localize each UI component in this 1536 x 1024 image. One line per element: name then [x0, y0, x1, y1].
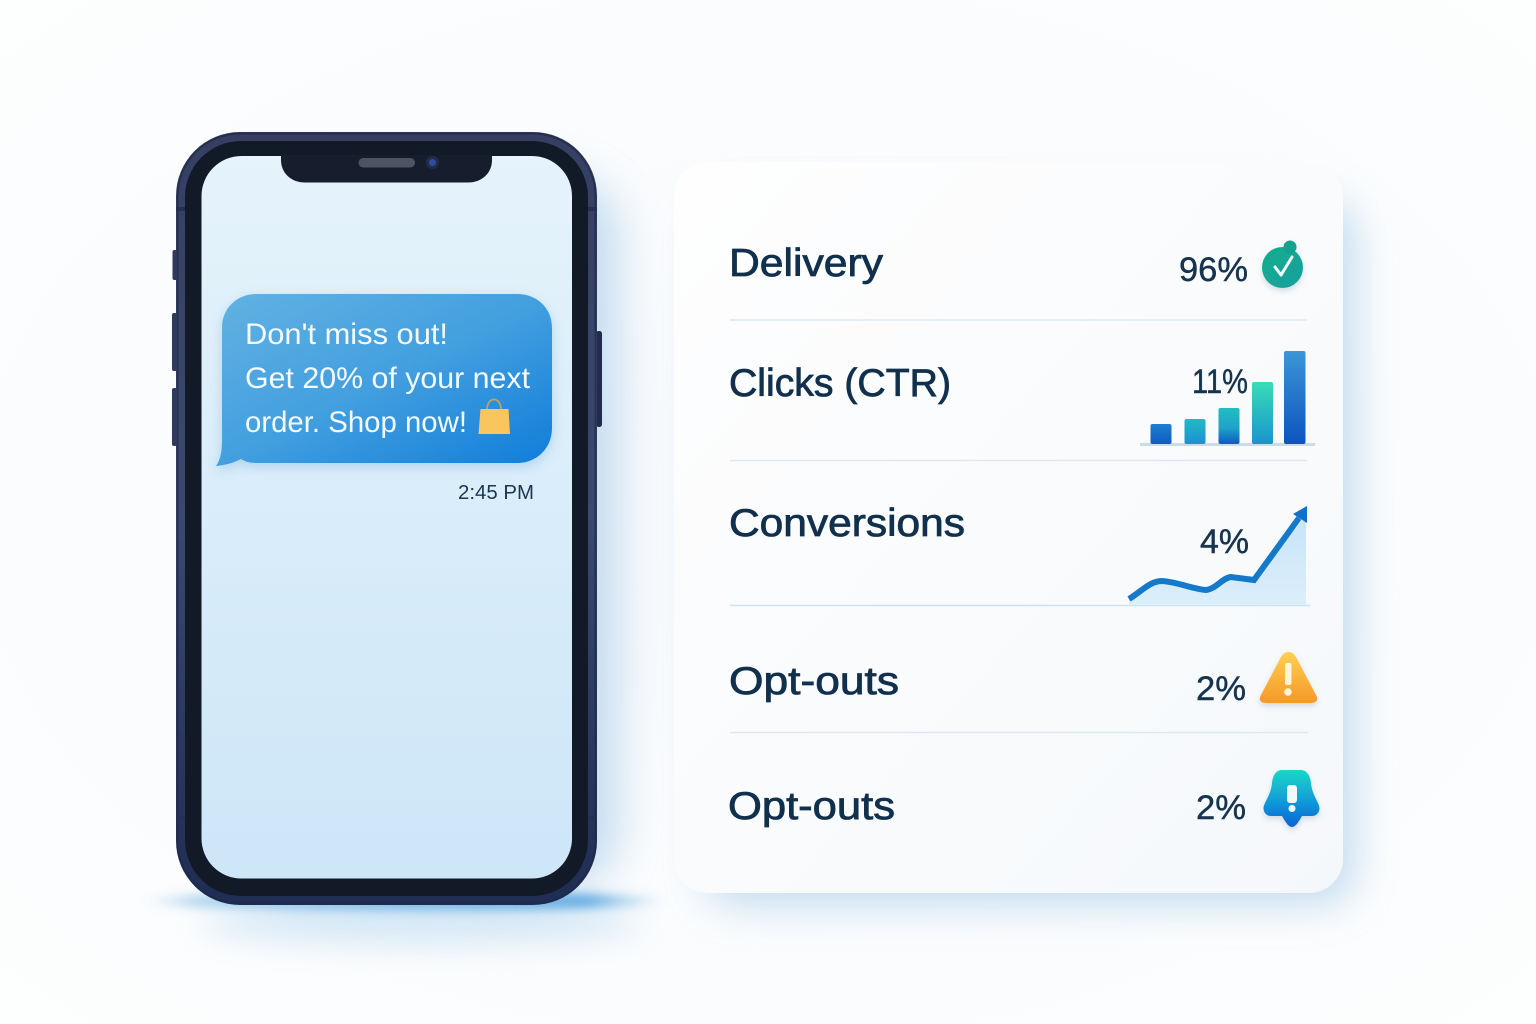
row: opt-outs bell	[728, 770, 1320, 828]
line chart	[1129, 506, 1307, 605]
message text: Get 20% of your next	[245, 362, 530, 395]
row: delivery: 96%	[1179, 251, 1248, 289]
camera	[426, 156, 439, 169]
bar chart	[1140, 351, 1315, 446]
row: clicks: 11%	[1192, 363, 1248, 401]
message text: Don't miss out!	[245, 318, 448, 351]
row: conversions: 4%	[1200, 523, 1249, 561]
message text: order. Shop now!	[245, 406, 467, 439]
icon: check badge	[1262, 240, 1303, 288]
bezel	[185, 141, 588, 896]
phone frame	[176, 132, 597, 905]
icon: shopping bag	[478, 400, 510, 434]
row: conversions: Conversions	[729, 502, 965, 545]
row: opt-outs warning: Opt-outs	[729, 660, 899, 703]
icon: bell alert	[1264, 770, 1320, 827]
phone shadow	[143, 175, 667, 944]
message bubble	[216, 294, 552, 470]
row: opt-outs warning	[729, 652, 1317, 708]
row: opt-outs bell: 2%	[1196, 789, 1246, 827]
row: opt-outs bell: Opt-outs	[728, 785, 895, 828]
antenna bands	[176, 207, 597, 819]
phone	[172, 132, 602, 905]
screen	[202, 156, 572, 878]
panel: metrics	[674, 162, 1343, 893]
row: delivery	[729, 240, 1303, 289]
speaker	[358, 158, 415, 168]
row: clicks	[729, 351, 1315, 446]
side buttons	[172, 250, 602, 446]
row: delivery: Delivery	[729, 242, 884, 285]
icon: warning triangle	[1260, 652, 1317, 703]
row: clicks: Clicks (CTR)	[729, 362, 951, 405]
message text	[245, 318, 530, 439]
row: opt-outs warning: 2%	[1196, 670, 1246, 708]
row: conversions	[729, 502, 1307, 605]
notch	[281, 155, 492, 182]
timestamp: 2:45 PM	[458, 481, 534, 504]
panel shadow	[705, 200, 1355, 905]
row dividers	[730, 320, 1310, 732]
